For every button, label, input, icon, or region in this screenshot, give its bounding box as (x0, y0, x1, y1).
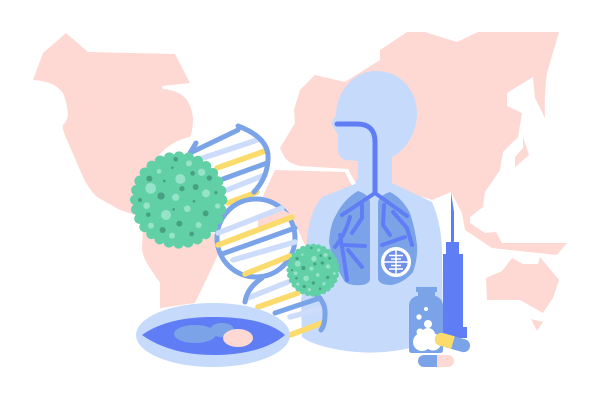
virus body (289, 246, 337, 294)
trachea and bronchi (335, 124, 412, 280)
continent: Tasmania (531, 319, 543, 331)
icon: lung target scan (383, 249, 409, 275)
helix lower loop (245, 278, 325, 335)
medicine bottle (409, 287, 443, 353)
world map (33, 32, 567, 331)
left lung (329, 191, 370, 285)
continent: Southeast Asia (462, 213, 567, 255)
syringe (443, 192, 467, 338)
culture medium (142, 317, 285, 355)
continent: Australia (486, 257, 559, 313)
dish rim (136, 303, 290, 367)
light spots (143, 160, 220, 239)
helix upper loop (190, 126, 268, 205)
bubbles (413, 307, 442, 351)
culture blobs (174, 323, 234, 343)
culture sample (223, 329, 253, 347)
large virus particle (135, 157, 222, 243)
virus body (135, 157, 222, 243)
continent: Africa (258, 170, 380, 245)
right lung (378, 192, 417, 285)
dark spots (138, 157, 218, 236)
capsule: blue and pink (418, 355, 454, 367)
continent: North America (33, 33, 193, 215)
small virus particle (289, 246, 337, 294)
silhouette (301, 71, 443, 353)
human torso and head (301, 71, 443, 353)
bottle cap and body (409, 287, 443, 353)
petri dish (136, 303, 290, 367)
continent: South America (142, 225, 225, 308)
light spots (294, 248, 336, 291)
dark spots (291, 247, 331, 290)
capsule: yellow and blue (433, 331, 472, 354)
DNA double helix (190, 126, 325, 335)
continent: Japan (515, 127, 536, 167)
helix middle loop (217, 199, 295, 277)
continent: Europe and Asia (280, 32, 559, 217)
